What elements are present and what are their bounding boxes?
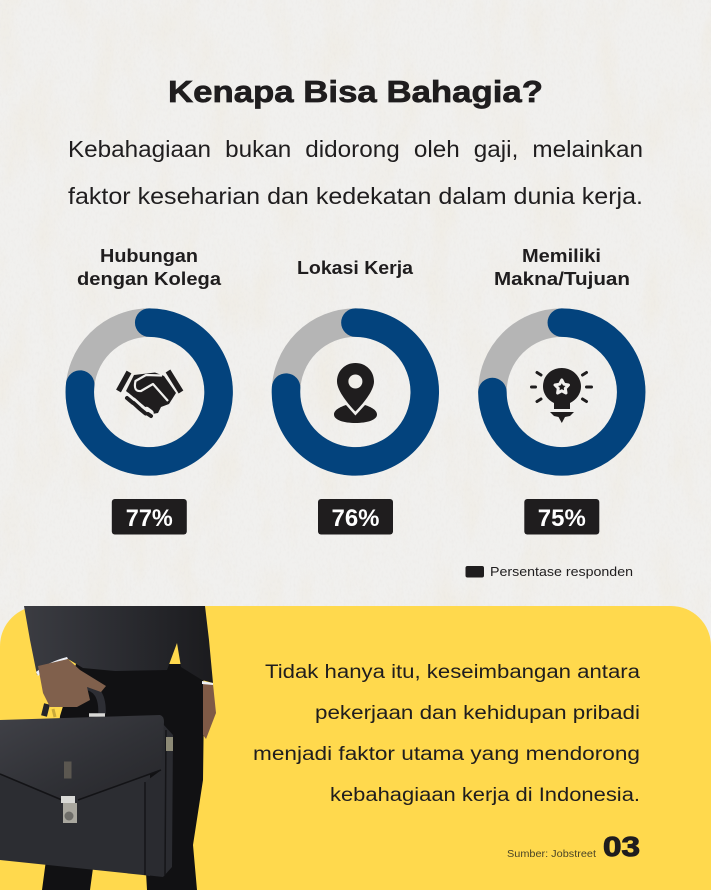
tag bbox=[64, 762, 72, 778]
intro text: Kebahagiaan bukan didorong oleh gaji, melainkan bbox=[68, 136, 643, 162]
trousers bbox=[42, 664, 204, 890]
briefcase side bbox=[145, 724, 173, 877]
heading: Hubungan dengan Kolega: Hubungan bbox=[100, 246, 198, 266]
callout text: menjadi faktor utama yang mendorong bbox=[253, 744, 640, 765]
callout text: kebahagiaan kerja di Indonesia. bbox=[330, 785, 640, 806]
title: Kenapa Bisa Bahagia? bbox=[168, 74, 543, 109]
callout text: Tidak hanya itu, keseimbangan antara bbox=[265, 662, 640, 683]
icon: handshake bbox=[118, 371, 181, 416]
panel: Memiliki Makna/Tujuan bbox=[492, 246, 631, 534]
callout text bbox=[253, 662, 640, 806]
badge: 77%: 77% bbox=[126, 505, 173, 532]
intro text: faktor keseharian dan kedekatan dalam dunia kerja. bbox=[68, 183, 643, 209]
badge: 75%: 75% bbox=[538, 505, 586, 532]
briefcase flap bbox=[0, 715, 164, 800]
icon: light bulb with star bbox=[532, 368, 592, 423]
panel: Hubungan dengan Kolega bbox=[77, 246, 222, 534]
briefcase body bbox=[0, 740, 150, 876]
donut chart: 75% bbox=[492, 323, 631, 461]
jacket bbox=[24, 606, 213, 683]
intro text bbox=[68, 136, 643, 209]
page number: 03 bbox=[603, 831, 640, 862]
clasp bbox=[61, 796, 75, 803]
heading: Hubungan dengan Kolega: dengan Kolega bbox=[77, 269, 222, 289]
source: Sumber: Jobstreet bbox=[507, 849, 596, 860]
heading: Memiliki Makna/Tujuan bbox=[494, 246, 630, 289]
donut chart: 77% bbox=[80, 323, 219, 461]
heading: Memiliki Makna/Tujuan: Makna/Tujuan bbox=[494, 269, 630, 289]
badge: 76%: 76% bbox=[332, 505, 380, 532]
illustration: businessman with briefcase bbox=[0, 606, 216, 890]
panel: Lokasi Kerja bbox=[286, 258, 425, 534]
badge: 77% bbox=[112, 499, 187, 534]
icon: location pin bbox=[334, 363, 377, 423]
heading: Lokasi Kerja: Lokasi Kerja bbox=[297, 258, 414, 278]
legend: Persentase responden bbox=[490, 565, 633, 579]
badge: 76% bbox=[318, 499, 393, 534]
right hand bbox=[203, 682, 216, 739]
heading: Memiliki Makna/Tujuan: Memiliki bbox=[522, 246, 601, 266]
left hand bbox=[38, 659, 106, 707]
panel: yellow callout bbox=[0, 606, 711, 890]
handle bbox=[85, 686, 102, 714]
badge: 75% bbox=[524, 499, 599, 534]
heading: Hubungan dengan Kolega bbox=[77, 246, 222, 289]
shirt cuffs bbox=[36, 657, 213, 685]
callout text: pekerjaan dan kehidupan pribadi bbox=[315, 703, 640, 724]
donut chart: 76% bbox=[286, 323, 425, 461]
